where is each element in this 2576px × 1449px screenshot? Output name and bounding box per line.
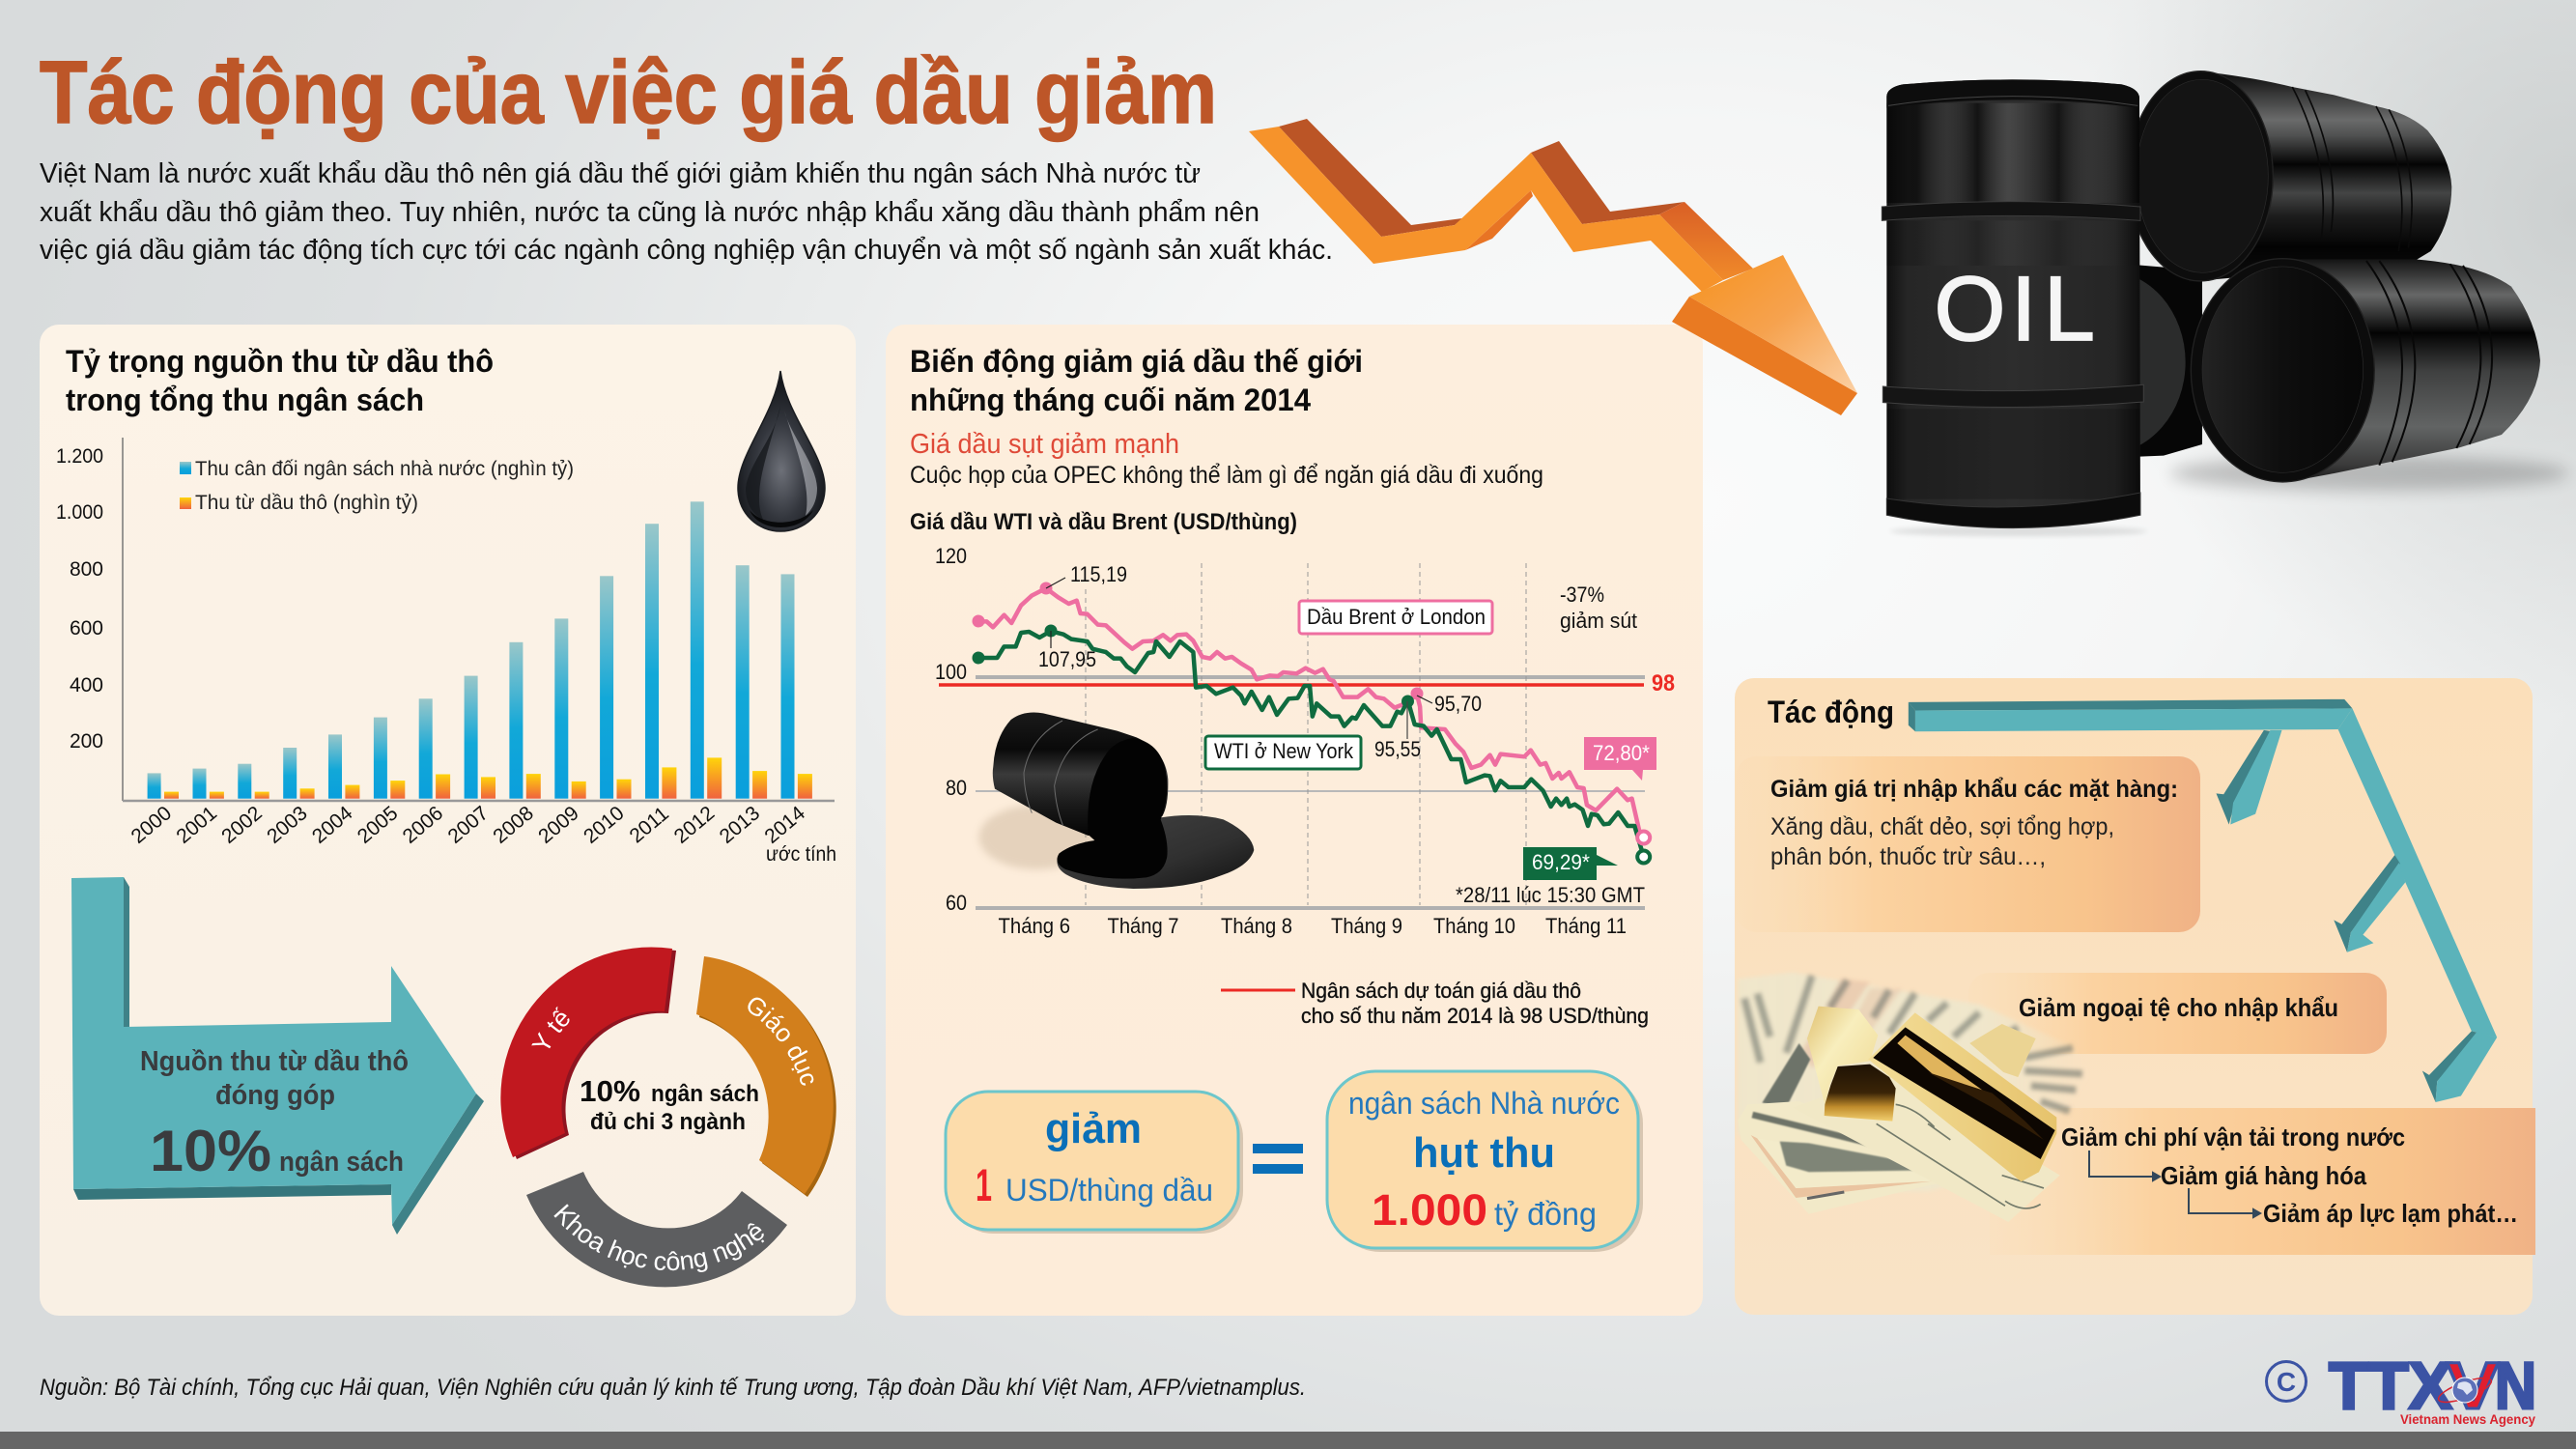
gold bar: large <box>1868 1012 2056 1181</box>
year labels <box>127 802 809 848</box>
year labels: 2005 <box>354 802 402 848</box>
barrel top rim <box>1886 79 2139 108</box>
segment: health <box>500 947 676 1159</box>
heading: Biến động giảm giá dầu thế giới <box>910 344 1363 379</box>
year labels: 2003 <box>263 802 312 848</box>
legend <box>180 458 574 514</box>
y axis: 600 <box>70 617 103 639</box>
month labels: Tháng 11 <box>1545 914 1627 938</box>
y axis: 1.000 <box>56 501 103 524</box>
month labels: Tháng 7 <box>1107 914 1178 938</box>
equation box: budget shortfall: 1.000 <box>1372 1185 1487 1235</box>
year labels: 2013 <box>716 802 764 848</box>
barrel rib lower <box>1882 384 2143 407</box>
intro text: xuất khẩu dầu thô giảm theo. Tuy nhiên, nước ta cũng là nước nhập khẩu xăng dầu thành phẩm nên <box>40 197 1260 228</box>
month labels: Tháng 9 <box>1331 914 1402 938</box>
arrow branch 3 <box>2422 1031 2479 1102</box>
series: Brent line <box>978 588 1641 838</box>
panel background <box>1735 678 2533 1315</box>
data labels: 95,70 <box>1434 692 1482 716</box>
equation box: 1 USD per barrel: giảm <box>1045 1105 1142 1152</box>
intro text <box>40 158 1333 266</box>
series: crude oil revenue <box>164 757 812 799</box>
arrow: oil revenue contribution <box>71 877 484 1235</box>
barrel rib upper <box>1882 202 2140 220</box>
y axis labels: 120 <box>935 544 967 568</box>
arrow text: ngân sách <box>279 1147 404 1178</box>
data labels <box>1038 562 1637 761</box>
legend: budget assumption: Ngân sách dự toán giá dầu thô <box>1301 979 1581 1003</box>
arrow branch 1 <box>2216 730 2273 825</box>
barrels behind and to the right <box>2025 71 2569 491</box>
donut centre text <box>580 1074 759 1135</box>
lower bills <box>1738 1101 1954 1214</box>
impact box: import value <box>1736 756 2200 932</box>
data labels: giảm sút <box>1560 609 1637 633</box>
text: transport impact chain <box>2061 1122 2518 1228</box>
subheading: Giá dầu sụt giảm mạnh <box>910 429 1179 460</box>
impact box: import value: phân bón, thuốc trừ sâu…, <box>1770 843 2046 870</box>
year labels: 2006 <box>399 802 447 848</box>
impact box: transport cost <box>1990 1108 2535 1255</box>
fanned bills <box>1738 973 2089 1191</box>
arrow branch 2 <box>2334 855 2400 952</box>
impact box: foreign currency: Giảm ngoại tệ cho nhập khẩu <box>2019 993 2338 1022</box>
data points <box>972 582 1650 864</box>
text: transport impact chain: Giảm chi phí vận tải trong nước <box>2061 1122 2405 1151</box>
agency letters: TTX <box>2329 1349 2452 1423</box>
oil barrels photo <box>1882 71 2569 536</box>
barrel label: OIL <box>1934 258 2095 360</box>
budget reference line: 98 <box>1652 670 1675 696</box>
year labels: 2000 <box>127 802 176 848</box>
legend: Thu cân đối ngân sách nhà nước (nghìn tỷ) <box>195 458 574 480</box>
barrel: upper right <box>2128 71 2451 282</box>
equation box: budget shortfall: tỷ đồng <box>1494 1196 1597 1232</box>
heading <box>66 344 494 417</box>
agency letters: N <box>2495 1349 2536 1423</box>
agency letters <box>2329 1349 2536 1423</box>
year labels: 2008 <box>489 802 538 848</box>
line chart: WTI and Brent <box>935 544 1675 938</box>
arrow text: 10% <box>150 1119 271 1183</box>
description: Cuộc họp của OPEC không thể làm gì để ngăn giá dầu đi xuống <box>910 462 1543 489</box>
callout: WTI New York <box>1205 736 1361 769</box>
year labels: 2012 <box>670 802 719 848</box>
year labels: 2011 <box>626 803 673 847</box>
y axis: 400 <box>70 674 103 696</box>
series: WTI line <box>978 631 1644 857</box>
y axis: 800 <box>70 558 103 581</box>
heading: những tháng cuối năm 2014 <box>910 383 1311 417</box>
title: Tác động của việc giá dầu giảm <box>40 43 1217 142</box>
donut: three sectors <box>500 947 836 1287</box>
y axis labels: 80 <box>946 776 967 800</box>
data labels: -37% <box>1560 582 1604 607</box>
segment: education: Giáo dục <box>748 997 813 1086</box>
intro text: Việt Nam là nước xuất khẩu dầu thô nên giá dầu thế giới giảm khiến thu ngân sách Nhà nước từ <box>40 158 1201 189</box>
segment: science and technology: Khoa học công nghệ <box>553 1204 765 1272</box>
panel background <box>40 325 856 1316</box>
panel: budget share <box>40 325 856 1316</box>
donut centre text: ngân sách <box>651 1081 759 1107</box>
estimate note: ước tính <box>766 843 836 866</box>
year labels: 2007 <box>444 802 493 848</box>
gold bar: back <box>1969 1024 2036 1077</box>
barrel: rear lower <box>2025 264 2202 457</box>
year labels: 2002 <box>217 802 267 848</box>
agency letters: V <box>2447 1349 2499 1423</box>
year labels: 2004 <box>308 802 357 848</box>
gold bar: small <box>1807 1007 1896 1122</box>
heading: trong tổng thu ngân sách <box>66 383 424 417</box>
arrow text <box>140 1046 409 1183</box>
donut centre text: 10% <box>580 1074 640 1108</box>
callout: Brent London <box>1299 601 1492 634</box>
donut centre text: đủ chi 3 ngành <box>590 1109 746 1135</box>
month labels: Tháng 6 <box>999 914 1070 938</box>
copyright mark <box>2266 1362 2307 1401</box>
callout: WTI final value: 69,29* <box>1532 850 1590 874</box>
year labels: 2009 <box>534 802 583 848</box>
source note: Nguồn: Bộ Tài chính, Tổng cục Hải quan, Viện Nghiên cứu quản lý kinh tế Trung ương, Tập đoàn Dầu khí Việt Nam, AFP/vietnamplus. <box>40 1375 1306 1401</box>
panel: oil price <box>886 325 1703 1316</box>
data labels: 115,19 <box>1070 562 1127 586</box>
callout: Brent London: Dầu Brent ở London <box>1307 605 1486 629</box>
impact box: foreign currency <box>1968 973 2387 1054</box>
heading: Tỷ trọng nguồn thu từ dầu thô <box>66 344 494 379</box>
large bill <box>1793 1072 2060 1222</box>
legend: budget assumption: cho số thu năm 2014 là 98 USD/thùng <box>1301 1004 1649 1028</box>
year labels: 2010 <box>580 802 629 848</box>
series: budget revenue <box>148 501 795 799</box>
arrow: falling oil price <box>1249 119 1857 415</box>
equals sign <box>1253 1144 1303 1174</box>
y axis <box>56 445 103 753</box>
month labels <box>999 914 1627 938</box>
arrow main diagonal <box>2338 708 2497 1037</box>
data labels: 95,55 <box>1374 737 1421 761</box>
heading <box>910 344 1363 417</box>
bar chart: budget revenue vs crude oil revenue <box>56 438 836 866</box>
text: transport impact chain: Giảm giá hàng hóa <box>2161 1161 2366 1190</box>
legend: Thu từ dầu thô (nghìn tỷ) <box>195 492 418 514</box>
branching arrow <box>1909 699 2497 1102</box>
panel background <box>886 325 1703 1316</box>
year labels: 2001 <box>172 802 221 848</box>
callout: Brent final value: 72,80* <box>1593 741 1650 765</box>
date note: *28/11 lúc 15:30 GMT <box>1456 883 1645 907</box>
arrow text: đóng góp <box>215 1080 335 1111</box>
copyright mark: C <box>2277 1367 2296 1397</box>
y axis labels: 60 <box>946 891 967 915</box>
year labels: 2014 <box>760 802 809 848</box>
month labels: Tháng 10 <box>1433 914 1515 938</box>
chart title: Giá dầu WTI và dầu Brent (USD/thùng) <box>910 509 1297 535</box>
footer band <box>0 1432 2576 1449</box>
arrow text: Nguồn thu từ dầu thô <box>140 1046 409 1077</box>
segment: education <box>696 956 836 1197</box>
equation box: 1 USD per barrel: 1 <box>976 1159 992 1210</box>
heading: Tác động <box>1768 695 1894 729</box>
segment: health: Y tế <box>531 1007 570 1049</box>
icon: oil drop <box>738 371 825 531</box>
equation box: budget shortfall: ngân sách Nhà nước <box>1348 1086 1620 1121</box>
equation box: 1 USD per barrel: USD/thùng dầu <box>1005 1173 1213 1208</box>
barrel: lower right <box>2191 259 2540 482</box>
data labels: 107,95 <box>1038 647 1096 671</box>
month labels: Tháng 8 <box>1221 914 1292 938</box>
barrel bottom rim <box>1886 493 2140 528</box>
illustration: gold bars and dollar bills <box>1738 973 2089 1222</box>
y axis labels <box>935 544 967 915</box>
illustration: spilled barrel <box>978 712 1254 889</box>
y axis: 1.200 <box>56 445 103 468</box>
globe emblem <box>2436 1374 2494 1406</box>
impact box: import value: Giảm giá trị nhập khẩu các mặt hàng: <box>1770 776 2178 803</box>
callout: WTI New York: WTI ở New York <box>1214 739 1354 763</box>
agency name: Vietnam News Agency <box>2400 1411 2535 1427</box>
arrow bar top <box>1909 699 2352 711</box>
legend: budget assumption <box>1221 979 1649 1028</box>
intro text: việc giá dầu giảm tác động tích cực tới các ngành công nghiệp vận chuyển và một số ngành sản xuất khác. <box>40 235 1333 266</box>
connector arrows <box>2089 1151 2260 1217</box>
equation box: budget shortfall: hụt thu <box>1413 1129 1555 1177</box>
callout: WTI final value <box>1523 847 1618 880</box>
panel: impact <box>1735 678 2535 1315</box>
callout: Brent final value <box>1584 737 1656 781</box>
segment: science and technology <box>526 1172 787 1287</box>
impact box: import value: Xăng dầu, chất dẻo, sợi tổng hợp, <box>1770 813 2114 840</box>
equation box: budget shortfall <box>1327 1071 1643 1252</box>
barrel: front standing <box>1882 79 2147 536</box>
text: transport impact chain: Giảm áp lực lạm phát… <box>2263 1199 2518 1228</box>
y axis labels: 100 <box>935 660 967 684</box>
equation box: 1 USD per barrel <box>946 1092 1243 1234</box>
logo: TTXVN <box>2266 1349 2536 1427</box>
y axis: 200 <box>70 730 103 753</box>
